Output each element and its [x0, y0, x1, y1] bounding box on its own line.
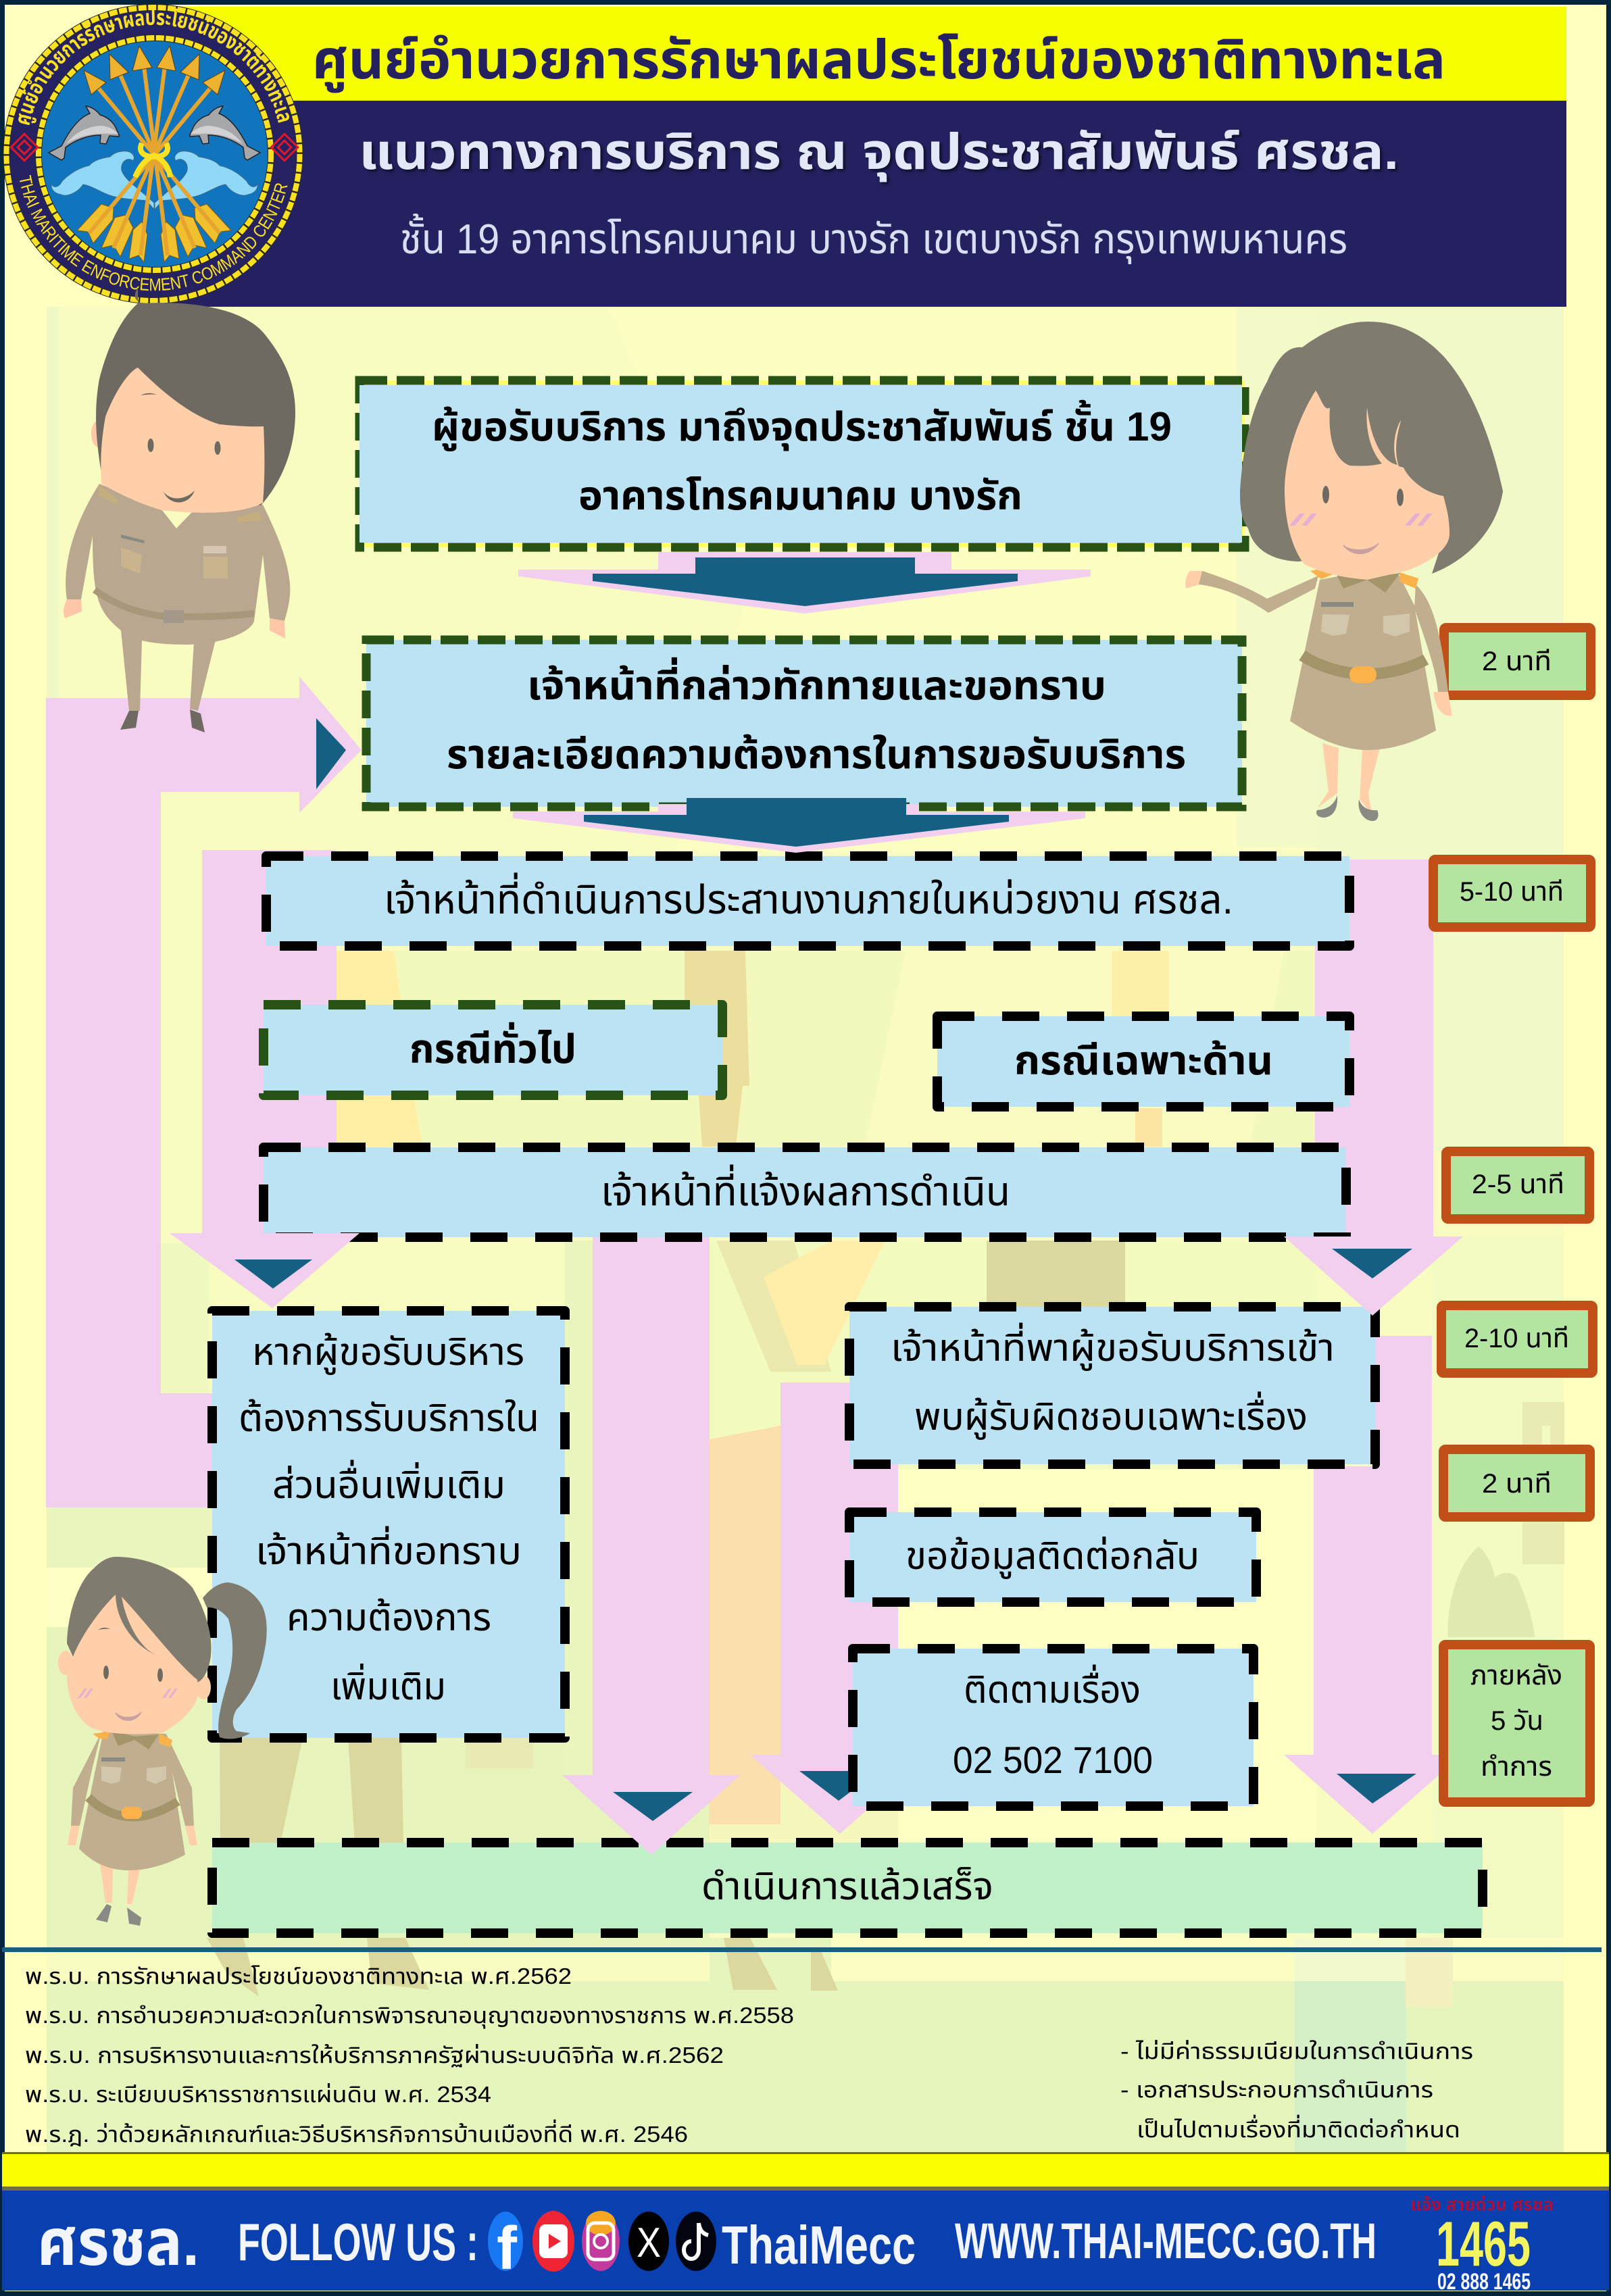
hotline number: 1465 — [1436, 2208, 1531, 2279]
title text: ศูนย์อำนวยการรักษาผลประโยชน์ของชาติทางทะเล — [312, 30, 1445, 93]
logo English name: THAI MARITIME ENFORCEMENT COMMAND CENTER — [20, 174, 288, 291]
box: additional services: เจ้าหน้าที่ขอทราบ — [255, 1526, 522, 1572]
logo: agency emblem — [3, 4, 303, 303]
box: additional services: ความต้องการ — [287, 1596, 491, 1639]
man uniform details — [95, 485, 262, 623]
box: follow-up phone — [853, 1649, 1254, 1806]
man legs and shoes — [120, 630, 216, 732]
box: additional services — [212, 1311, 565, 1738]
phone number: 02 888 1465 — [1437, 2269, 1531, 2295]
legal references: พ.ร.บ. ระเบียบบริหารราชการแผ่นดิน พ.ศ. 2534 — [25, 2082, 491, 2107]
logo arrows — [89, 61, 220, 255]
subtitle: แนวทางการบริการ ณ จุดประชาสัมพันธ์ ศรชล. — [359, 124, 1399, 182]
man ears — [91, 420, 282, 476]
box: additional services: หากผู้ขอรับบริหาร — [252, 1330, 524, 1375]
arrow head: right column upper — [1284, 1237, 1463, 1316]
logo dolphins — [49, 106, 260, 160]
social handle: ThaiMecc — [722, 2215, 916, 2275]
logo knot — [135, 143, 170, 177]
girl ponytail — [203, 1582, 267, 1739]
arrow: first down arrow — [518, 552, 1091, 614]
box: completed — [212, 1843, 1483, 1933]
box: request contact information — [849, 1512, 1256, 1602]
box: internal coordination: เจ้าหน้าที่ดำเนินการประสานงานภายในหน่วยงาน ศรชล. — [384, 872, 1233, 922]
time tag: 2 minutes — [1444, 628, 1591, 695]
address: ชั้น 19 อาคารโทรคมนาคม บางรัก เขตบางรัก กรุงเทพมหานคร — [400, 214, 1347, 264]
notes: - เอกสารประกอบการดำเนินการ — [1120, 2077, 1433, 2102]
time tag: within 5 working days: 5 วัน — [1491, 1706, 1543, 1736]
man hands — [64, 599, 285, 639]
character: woman pointing — [1185, 322, 1503, 821]
box: escort to responsible officer: เจ้าหน้าที่พาผู้ขอรับบริการเข้า — [891, 1322, 1335, 1371]
time tag: 2-5 minutes — [1446, 1151, 1589, 1219]
faint figures — [337, 951, 422, 1147]
time tag: 2-10 minutes — [1441, 1305, 1593, 1373]
box: notify result: เจ้าหน้าที่แจ้งผลการดำเนิน — [601, 1164, 1010, 1214]
box: additional services: ต้องการรับบริการใน — [239, 1397, 539, 1439]
woman uniform details — [1302, 566, 1426, 683]
time tag: within 5 working days: ภายหลัง — [1470, 1661, 1562, 1691]
girl eyes and blush — [78, 1628, 178, 1720]
girl hands — [68, 1826, 197, 1845]
icon: youtube — [532, 2211, 574, 2272]
logo ornaments — [11, 134, 298, 161]
woman dress — [1290, 571, 1436, 750]
box: requester arrives: ผู้ขอรับบริการ มาถึงจุดประชาสัมพันธ์ ชั้น 19 — [432, 399, 1172, 451]
man body — [66, 484, 290, 645]
time tag: 2 minutes second — [1443, 1449, 1590, 1517]
logo fletchings — [77, 204, 231, 262]
box: request contact information: ขอข้อมูลติดต่อกลับ — [906, 1534, 1199, 1579]
logo Thai name: ศูนย์อำนวยการรักษาผลประโยชน์ของชาติทางทะเล — [18, 8, 289, 126]
website: WWW.THAI-MECC.GO.TH — [955, 2213, 1377, 2269]
icon: facebook — [488, 2212, 523, 2282]
notes: เป็นไปตามเรื่องที่มาติดต่อกำหนด — [1137, 2114, 1460, 2142]
arrow shafts: flow columns — [202, 850, 1433, 1777]
box: general case — [264, 1005, 722, 1095]
character: man — [64, 287, 295, 732]
character: girl with ponytail — [58, 1557, 267, 1926]
arrow: centre down arrow head — [562, 1775, 740, 1855]
arrow: second down arrow — [513, 798, 1085, 853]
time tag: within 5 working days: ทำการ — [1481, 1752, 1552, 1782]
arrow head: left column — [170, 1233, 360, 1308]
arrow: long left return arrow — [46, 676, 362, 1507]
girl uniform details — [89, 1730, 178, 1819]
time tag: within 5 working days — [1443, 1645, 1590, 1802]
man hair — [96, 287, 295, 505]
woman face — [1285, 391, 1449, 580]
hotline label: แจ้ง สายด่วน ศรชล — [1410, 2194, 1554, 2214]
girl arms — [71, 1732, 194, 1826]
logo waves — [51, 151, 257, 209]
box: staff greeting — [366, 640, 1242, 807]
box: follow-up phone: 02 502 7100 — [953, 1739, 1153, 1781]
woman arms — [1199, 571, 1448, 692]
box: requester arrives: อาคารโทรคมนาคม บางรัก — [578, 473, 1022, 518]
box: staff greeting: รายละเอียดความต้องการในการขอรับบริการ — [447, 732, 1186, 777]
girl face — [67, 1595, 198, 1734]
time tag: 2-5 minutes: 2-5 นาที — [1472, 1170, 1564, 1199]
sub-header panel — [153, 101, 1566, 307]
girl ears — [58, 1651, 211, 1699]
divider line — [2, 1947, 1602, 1952]
girl legs and shoes — [96, 1864, 141, 1926]
agency short name: ศรชล. — [37, 2207, 199, 2279]
box: escort to responsible officer — [849, 1307, 1375, 1464]
title banner — [153, 7, 1566, 101]
box: additional services: เพิ่มเติม — [330, 1663, 446, 1707]
legal references — [25, 1964, 794, 2147]
box: additional services: ส่วนอื่นเพิ่มเติม — [272, 1459, 505, 1506]
legal references: พ.ร.บ. การรักษาผลประโยชน์ของชาติทางทะเล พ.ศ.2562 — [25, 1964, 572, 1989]
notes — [1120, 2039, 1473, 2142]
yellow footer band — [2, 2152, 1609, 2191]
icon: X — [628, 2212, 669, 2271]
legal references: พ.ร.บ. การอำนวยความสะดวกในการพิจารณาอนุญาตของทางราชการ พ.ศ.2558 — [25, 2003, 794, 2029]
girl dress — [79, 1731, 185, 1870]
box: specific case: กรณีเฉพาะด้าน — [1014, 1038, 1273, 1083]
box: requester arrives — [360, 380, 1245, 547]
box: general case: กรณีทั่วไป — [410, 1022, 576, 1072]
icon: facebook: f — [497, 2215, 518, 2282]
man eyes and mouth — [141, 393, 220, 503]
box: internal coordination — [266, 856, 1349, 946]
man face — [101, 368, 264, 513]
box: completed: ดำเนินการแล้วเสร็จ — [701, 1865, 993, 1907]
legal references: พ.ร.บ. การบริหารงานและการให้บริการภาครัฐผ่านระบบดิจิทัล พ.ศ.2562 — [25, 2043, 724, 2068]
woman legs and shoes — [1316, 743, 1380, 821]
box: follow-up phone: ติดตามเรื่อง — [964, 1664, 1141, 1711]
woman eyes and blush — [1289, 486, 1433, 553]
legal references: พ.ร.ฎ. ว่าด้วยหลักเกณฑ์และวิธีบริหารกิจการบ้านเมืองที่ดี พ.ศ. 2546 — [25, 2119, 688, 2147]
time tag: 5-10 minutes: 5-10 นาที — [1460, 877, 1564, 907]
arrow: middle branch arrow head — [750, 1755, 929, 1834]
woman hair — [1240, 322, 1503, 574]
time tag: 2-10 minutes: 2-10 นาที — [1464, 1324, 1569, 1353]
woman hands — [1185, 571, 1452, 716]
blue footer band — [2, 2191, 1609, 2295]
icon: X: X — [637, 2220, 661, 2266]
box: notify result — [264, 1147, 1346, 1237]
notes: - ไม่มีค่าธรรมเนียมในการดำเนินการ — [1120, 2039, 1473, 2064]
box: specific case — [937, 1016, 1349, 1107]
box: escort to responsible officer: พบผู้รับผิดชอบเฉพาะเรื่อง — [914, 1391, 1308, 1440]
arrow: right lower arrow head — [1284, 1755, 1462, 1834]
time tag: 5-10 minutes — [1433, 859, 1591, 927]
box: staff greeting: เจ้าหน้าที่กล่าวทักทายและขอทราบ — [527, 657, 1106, 708]
time tag: 2 minutes second: 2 นาที — [1482, 1469, 1552, 1499]
icon: instagram — [582, 2211, 620, 2271]
time tag: 2 minutes: 2 นาที — [1482, 647, 1552, 676]
girl hair — [67, 1557, 212, 1682]
follow us: FOLLOW US : — [238, 2212, 478, 2272]
icon: tiktok — [676, 2212, 716, 2271]
